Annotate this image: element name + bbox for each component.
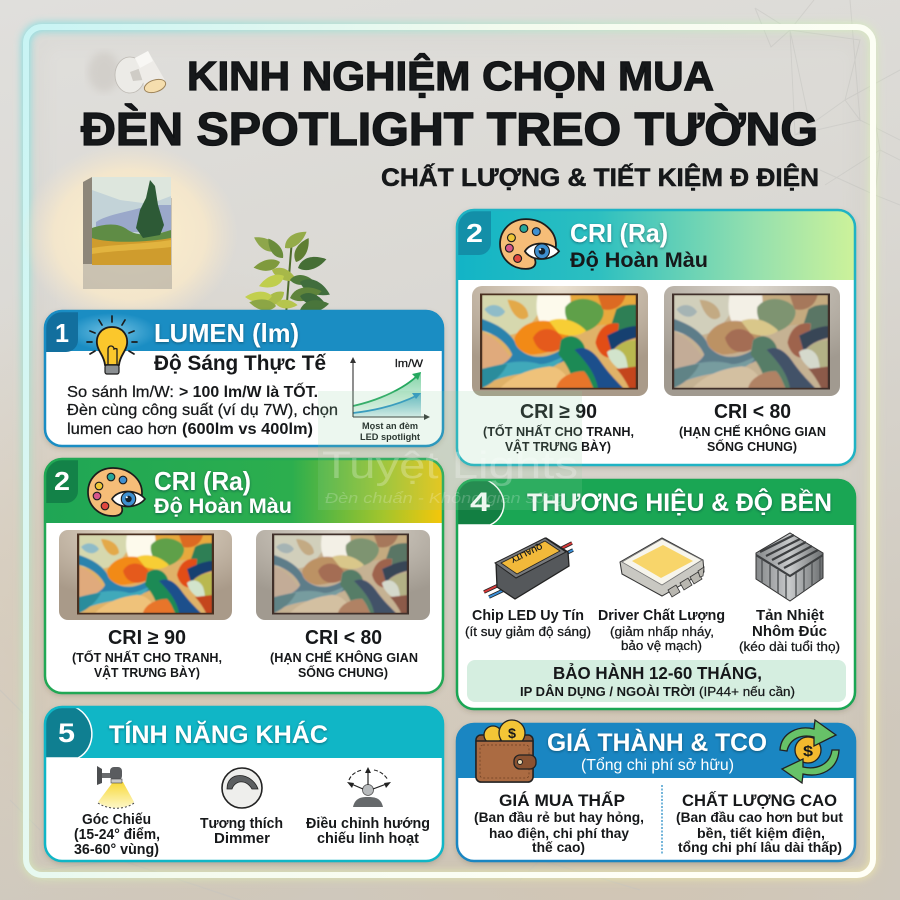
icon: LED chip	[620, 538, 704, 597]
label: CRI 80: (HẠN CHẾ KHÔNG GIAN	[679, 424, 826, 439]
watermark: Tuyệt Lights	[322, 445, 578, 487]
label: CRI 90: (TỐT NHẤT CHO TRANH,	[483, 424, 634, 439]
lumen body text: So sánh lm/W:	[67, 384, 174, 401]
column: low purchase price: hao điện, chi phí thay	[489, 825, 629, 841]
lumen efficiency chart	[350, 357, 430, 443]
lumen header	[45, 311, 443, 351]
CRI right heading	[570, 218, 708, 272]
number badge 4	[457, 480, 504, 525]
lumen body text: (600lm vs 400lm)	[182, 421, 313, 438]
title: CHẤT LƯỢNG & TIẾT KIỆM Đ ĐIỆN	[381, 162, 819, 192]
text: LED chip: (ít suy giảm độ sáng)	[465, 625, 591, 639]
icon: adjustable direction	[347, 767, 391, 807]
spotlight glow on wall	[22, 143, 238, 327]
panel: lumen	[45, 311, 443, 446]
features header	[45, 707, 443, 758]
number badge 2: 2	[54, 466, 70, 496]
label: CRI 80: CRI < 80	[305, 627, 382, 649]
text: adjustable direction: chiếu linh hoạt	[317, 831, 419, 847]
panel: CRI right	[457, 210, 855, 465]
number badge 2: 2	[466, 218, 483, 248]
price heading: GIÁ THÀNH & TCO	[547, 728, 767, 757]
label: CRI 80: SỐNG CHUNG)	[298, 665, 388, 680]
CRI right heading: Độ Hoàn Màu	[570, 249, 708, 272]
column: low purchase price	[474, 791, 644, 855]
label: CRI 90: CRI ≥ 90	[520, 401, 597, 423]
lumen heading	[154, 318, 326, 375]
lumen body text: lumen cao hơn	[67, 421, 177, 438]
text: dimmer: Dimmer	[214, 831, 270, 847]
column: low purchase price: GIÁ MUA THẤP	[499, 791, 625, 810]
panel: CRI left	[45, 459, 443, 693]
icon: aluminium heat sink	[756, 533, 823, 601]
lumen heading: LUMEN (lm)	[154, 318, 299, 348]
text: dimmer	[200, 816, 283, 847]
label: CRI 80: CRI < 80	[714, 401, 791, 423]
warranty callout	[467, 660, 846, 702]
watermark: Đèn chuẩn - Không gian sống	[325, 490, 566, 507]
number badge 5: 5	[58, 718, 75, 748]
label: CRI 80: SỐNG CHUNG)	[707, 439, 797, 454]
column: high quality: bền, tiết kiệm điện,	[697, 825, 825, 841]
price heading: (Tổng chi phí sở hữu)	[581, 756, 734, 774]
warranty callout: (IP44+ nếu cần)	[699, 684, 795, 699]
CRI left header	[45, 459, 443, 523]
number badge 1: 1	[55, 318, 69, 348]
wall spotlight lamp	[88, 51, 167, 95]
painting: low CRI	[664, 286, 840, 396]
painting: high CRI	[472, 286, 648, 396]
text: beam angle	[74, 812, 160, 858]
label: CRI 90: VẬT TRƯNG BÀY)	[505, 439, 611, 454]
icon: beam angle spotlight	[97, 766, 134, 808]
lumen body text: > 100 lm/W là TỐT.	[179, 383, 318, 401]
icon: light bulb	[87, 316, 137, 374]
lumen efficiency chart: Mọst an đèm	[362, 421, 418, 432]
title: ĐÈN SPOTLIGHT TREO TƯỜNG	[81, 103, 818, 155]
text: driver	[598, 607, 725, 653]
icon: money cycle arrows	[780, 720, 839, 783]
warranty callout: BẢO HÀNH 12-60 THÁNG,	[553, 662, 762, 683]
icon: wallet with coins	[476, 720, 536, 782]
text: LED chip: Chip LED Uy Tín	[472, 607, 584, 624]
lumen efficiency chart: LED spotlight	[360, 432, 421, 443]
text: LED chip	[465, 607, 591, 639]
number badge 5	[45, 707, 92, 758]
panel: brand and durability	[457, 480, 855, 709]
icon: palette and eye	[500, 219, 559, 269]
number badge 4: 4	[470, 487, 490, 517]
text: heat sink: (kéo dài tuổi thọ)	[739, 640, 840, 654]
wall painting	[83, 177, 172, 289]
price header	[457, 724, 855, 778]
label: CRI 90: (TỐT NHẤT CHO TRANH,	[72, 650, 222, 665]
column: high quality: (Ban đầu cao hơn but but	[676, 809, 843, 825]
icon: money cycle arrows: $	[803, 743, 814, 760]
lumen efficiency chart: lm/W	[395, 358, 424, 370]
number badge 2	[45, 459, 78, 503]
text: driver: bảo vệ mạch)	[621, 639, 702, 653]
brand header	[457, 480, 855, 525]
watermark	[318, 391, 582, 510]
painting: low CRI	[256, 530, 430, 620]
brand heading: THƯƠNG HIỆU & ĐỘ BỀN	[527, 487, 832, 517]
text: driver: (giảm nhấp nháy,	[610, 625, 714, 639]
icon: wallet with coins: $	[508, 725, 516, 741]
text: beam angle: 36-60° vùng)	[74, 842, 159, 858]
painting: high CRI	[59, 530, 232, 620]
text: beam angle: Góc Chiếu	[82, 812, 151, 828]
lumen body text: Đèn cùng công suất (ví dụ 7W), chọn	[67, 402, 338, 419]
icon: dimmer dial	[222, 768, 262, 808]
label: CRI 80	[270, 627, 418, 680]
CRI right heading: CRI (Ra)	[570, 218, 668, 248]
panel: price and TCO	[457, 720, 855, 861]
icon: LED driver box	[484, 538, 573, 599]
title	[81, 53, 819, 192]
text: beam angle: (15-24° điểm,	[74, 827, 160, 843]
text: adjustable direction	[306, 816, 430, 847]
label: CRI 90: VẬT TRƯNG BÀY)	[94, 665, 200, 680]
text: heat sink	[739, 607, 840, 654]
lumen body text	[67, 383, 338, 438]
CRI left heading	[154, 466, 292, 518]
column: low purchase price: thế cao)	[532, 839, 585, 855]
title: KINH NGHIỆM CHỌN MUA	[187, 53, 714, 99]
label: CRI 90: CRI ≥ 90	[108, 627, 186, 649]
label: CRI 90	[483, 401, 634, 454]
column: high quality: tổng chi phí lâu dài thấp)	[678, 839, 842, 855]
CRI left heading: Độ Hoàn Màu	[154, 495, 292, 518]
label: CRI 80: (HẠN CHẾ KHÔNG GIAN	[270, 650, 418, 665]
label: CRI 90	[72, 627, 222, 680]
column: high quality	[676, 791, 843, 855]
features heading: TÍNH NĂNG KHÁC	[109, 720, 328, 749]
text: heat sink: Tản Nhiệt	[756, 607, 824, 624]
warranty callout: IP DÂN DỤNG / NGOÀI TRỜI	[520, 684, 695, 699]
price heading	[547, 728, 767, 774]
lumen heading: Độ Sáng Thực Tế	[154, 352, 326, 375]
number badge 2	[457, 210, 491, 255]
text: heat sink: Nhôm Đúc	[752, 623, 827, 640]
panel: other features	[45, 707, 443, 861]
label: CRI 80	[679, 401, 826, 454]
CRI right header	[457, 210, 855, 280]
icon: palette and eye	[88, 468, 145, 516]
icon: LED driver box: QUALITY	[509, 542, 544, 565]
text: adjustable direction: Điều chỉnh hướng	[306, 816, 430, 832]
column: low purchase price: (Ban đầu rẻ but hay hỏng,	[474, 809, 644, 825]
text: dimmer: Tương thích	[200, 816, 283, 832]
CRI left heading: CRI (Ra)	[154, 466, 251, 496]
text: driver: Driver Chất Lượng	[598, 607, 725, 624]
potted plant leaves	[245, 227, 333, 315]
number badge 1	[45, 311, 78, 352]
column: high quality: CHẤT LƯỢNG CAO	[682, 791, 837, 810]
